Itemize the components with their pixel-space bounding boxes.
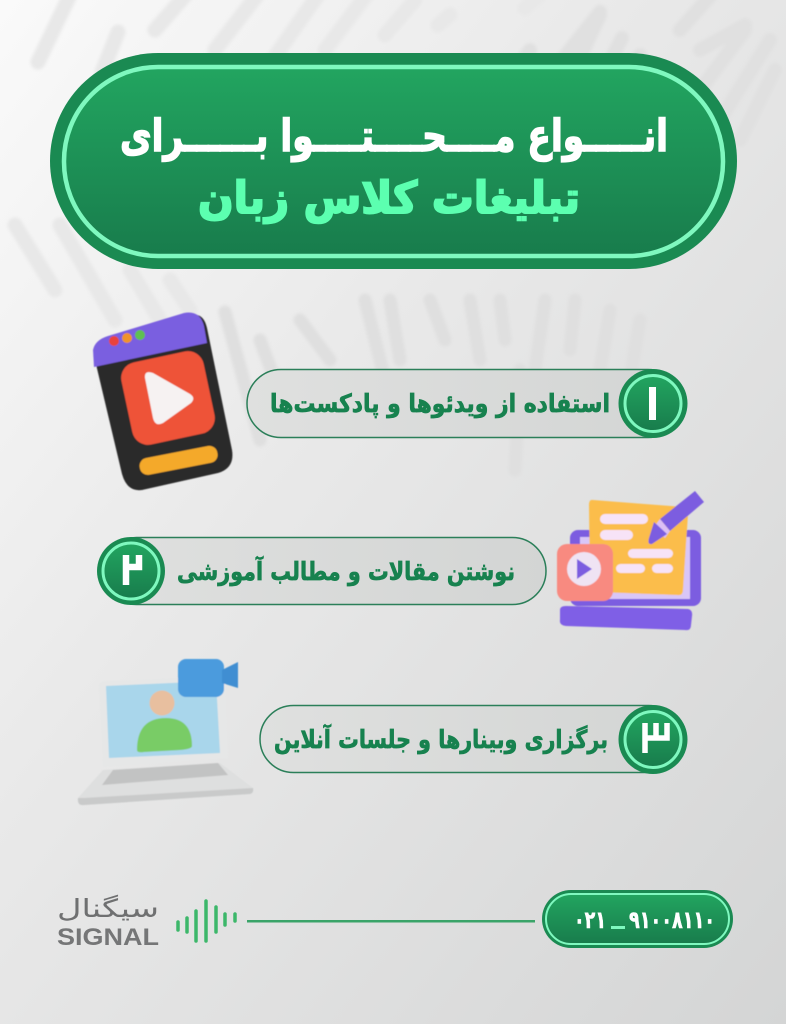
text 1: استفاده از ویدئوها و پادکست‌ها <box>270 389 610 419</box>
phone number: ۰۲۱ <box>574 906 606 934</box>
icon: webinar laptop <box>78 659 253 805</box>
phone number: ۹۱۰۰۸۱۱۰ <box>629 906 715 934</box>
pill 3 <box>260 706 682 772</box>
item 2 <box>97 537 546 605</box>
icon: sound wave <box>178 901 235 941</box>
pill 1 <box>247 370 682 438</box>
icon: article laptop <box>557 491 704 630</box>
text 2: نوشتن مقالات و مطالب آموزشی <box>177 556 515 587</box>
text 3: برگزاری وبینارها و جلسات آنلاین <box>274 724 608 755</box>
logo latin wordmark: SIGNAL <box>57 924 159 951</box>
phone number pill <box>542 890 733 948</box>
logo persian wordmark: سیگنال <box>57 894 159 923</box>
title line 2: تبلیغات کلاس زبان <box>198 173 580 224</box>
item 1 <box>247 369 688 438</box>
badge 1 <box>618 369 688 438</box>
item 3 <box>260 705 688 774</box>
logo: signal <box>57 894 235 951</box>
icon: video player phone <box>93 313 232 490</box>
phone number <box>574 906 715 934</box>
connector line <box>247 920 535 922</box>
pill 2 <box>103 538 546 604</box>
badge 2 <box>97 537 165 605</box>
badge 3 <box>618 705 688 774</box>
title banner <box>50 53 737 269</box>
